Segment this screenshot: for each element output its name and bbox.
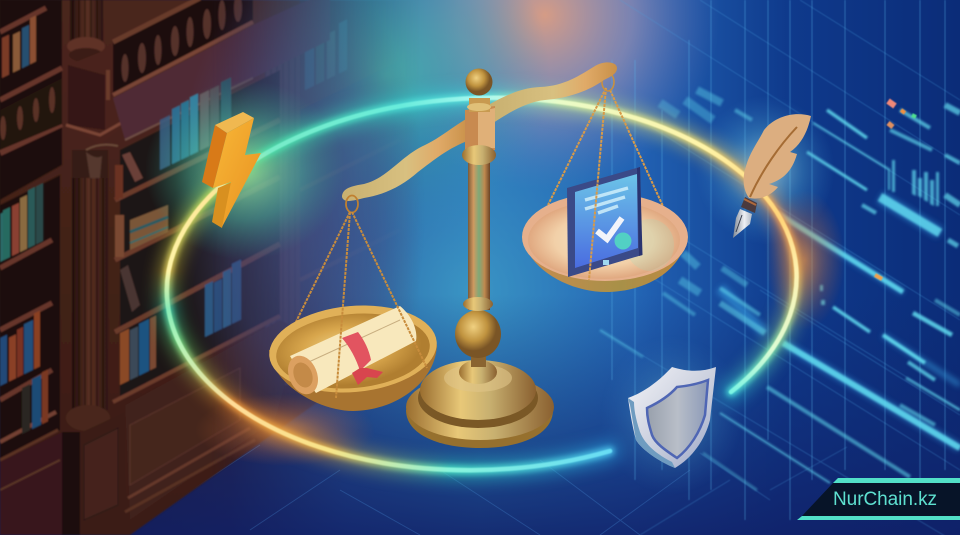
balustrade — [113, 0, 253, 95]
tablet home button — [603, 260, 609, 265]
pier base — [62, 420, 118, 535]
right chains behind pan front — [548, 88, 682, 248]
icon: shield — [628, 367, 716, 468]
left beam arm — [342, 118, 470, 201]
streak glow — [720, 197, 960, 448]
data streaks — [600, 90, 960, 490]
balance scale — [266, 62, 688, 448]
bottom left panel — [62, 432, 63, 534]
column upper — [67, 0, 105, 62]
tablet text lines — [585, 188, 628, 213]
pole knob — [455, 297, 501, 384]
tablet — [567, 167, 642, 277]
pole — [468, 160, 490, 310]
glowing ring — [148, 82, 816, 490]
books bay stacks — [115, 205, 168, 257]
right chain ring — [602, 73, 614, 91]
books top left — [2, 15, 36, 78]
floor grid lines — [130, 445, 690, 535]
books bay row 1 — [160, 77, 231, 170]
coloured data points — [875, 101, 916, 279]
books left mid — [0, 183, 43, 262]
icon: quill feather — [733, 114, 811, 238]
lower panel — [124, 322, 286, 514]
books bay row 3 — [120, 315, 156, 385]
logo: NurChain.kz: NurChain.kz — [833, 489, 937, 510]
base — [406, 360, 554, 448]
ring glow around objects — [145, 80, 845, 495]
oblique grid lines — [600, 0, 960, 535]
right pan — [522, 193, 688, 292]
purple entablature band — [113, 0, 330, 140]
left chain ring — [346, 196, 358, 212]
middle bay cavity — [113, 70, 280, 402]
logo: NurChain.kz — [797, 478, 960, 520]
top left shelves — [0, 0, 62, 200]
tablet seal — [614, 232, 632, 250]
left chains back — [293, 212, 350, 328]
right centre chain — [589, 88, 606, 280]
purple haze over distant bookcase — [175, 0, 425, 460]
left mid shelves — [0, 175, 60, 460]
data grid panel — [600, 0, 960, 535]
data bars — [820, 160, 939, 305]
right beam arm — [490, 62, 617, 125]
pier upper — [65, 46, 122, 138]
column lower — [66, 145, 118, 431]
ribbon — [342, 332, 371, 371]
second bay in distance — [266, 20, 348, 384]
vertical grid lines — [612, 0, 945, 520]
scroll — [283, 306, 416, 399]
tablet check mark — [597, 218, 622, 239]
icon: lightning bolt — [202, 112, 261, 228]
left front chains — [336, 212, 427, 398]
pivot block — [462, 68, 496, 165]
wood backdrop — [0, 0, 420, 535]
library bookcases — [0, 0, 420, 535]
left pan — [266, 299, 440, 411]
